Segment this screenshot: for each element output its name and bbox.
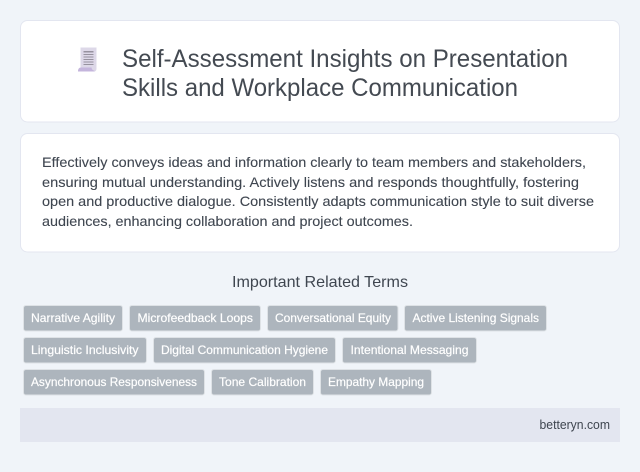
related terms tags: Narrative Agility (31, 311, 115, 325)
description panel: ensuring mutual understanding. Actively listens and responds thoughtfully, fostering (42, 174, 579, 190)
description panel: open and productive dialogue. Consistently adapts communication style to suit diverse (42, 193, 594, 209)
description panel: Effectively conveys ideas and information clearly to team members and stakeholders, (42, 154, 586, 170)
related terms tags (24, 306, 546, 395)
related terms tags: Asynchronous Responsiveness (31, 375, 197, 389)
description panel (20, 134, 620, 252)
title (122, 45, 568, 102)
related terms tags: Microfeedback Loops (138, 311, 253, 325)
footer bar (20, 408, 620, 442)
related terms tags: Digital Communication Hygiene (161, 343, 328, 357)
related terms tags: Linguistic Inclusivity (31, 343, 138, 357)
related terms heading: Important Related Terms (232, 274, 408, 291)
related terms tags: Tone Calibration (219, 375, 306, 389)
related terms tags: Intentional Messaging (350, 343, 468, 357)
related terms tags: Active Listening Signals (412, 311, 539, 325)
title: Self-Assessment Insights on Presentation (122, 45, 568, 73)
header panel (20, 20, 620, 122)
related terms tags: Conversational Equity (275, 311, 391, 325)
icon: paper scroll document (78, 48, 96, 72)
description panel: audiences, enhancing collaboration and project outcomes. (42, 213, 413, 229)
footer text: site name: betteryn.com (540, 418, 610, 432)
title: Skills and Workplace Communication (122, 74, 518, 102)
related terms tags: Empathy Mapping (328, 375, 424, 389)
